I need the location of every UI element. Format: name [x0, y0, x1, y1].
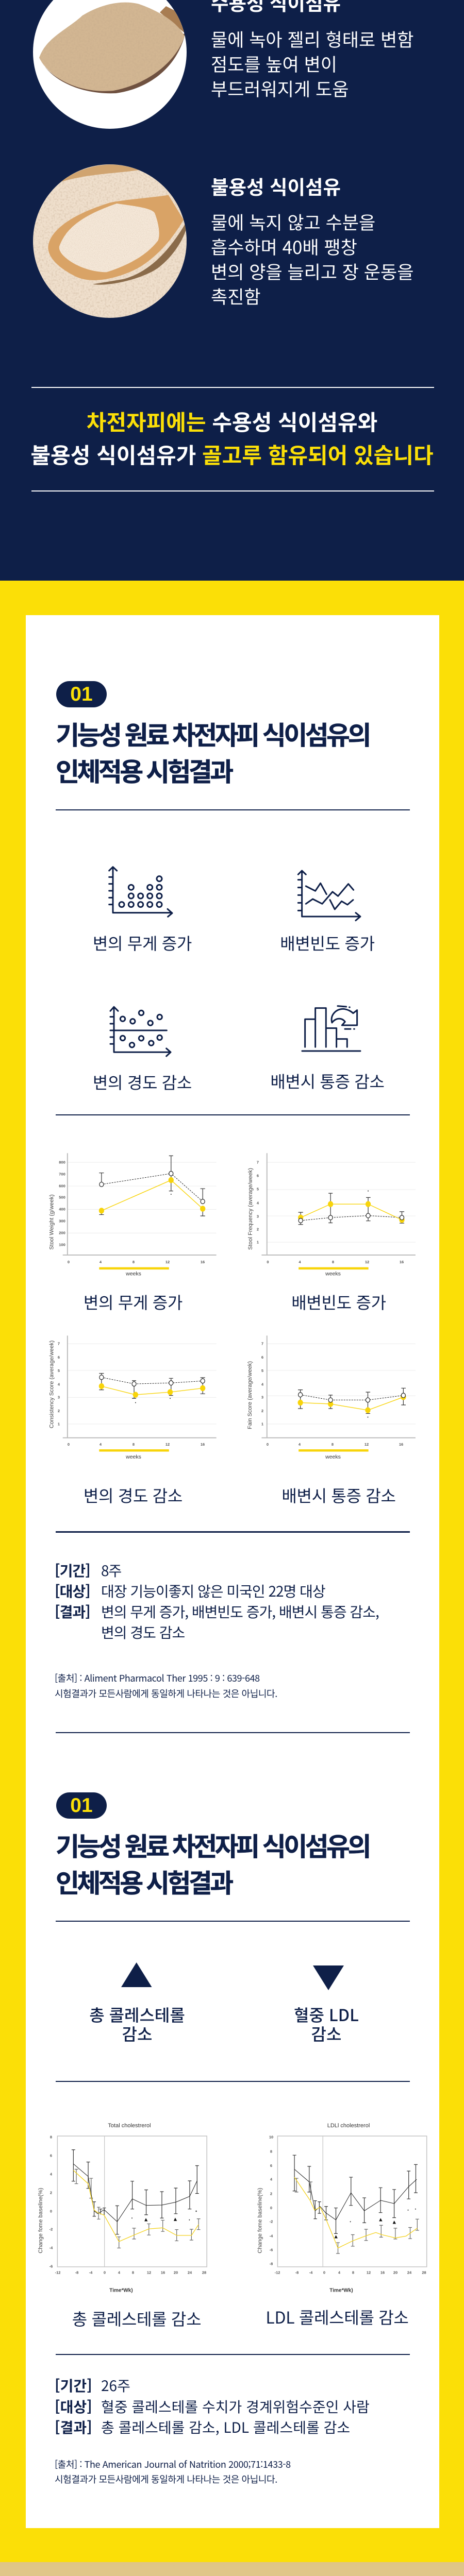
- text: study details 2: [기간]: [55, 2375, 92, 2396]
- caption: LDL chart: LDL 콜레스테롤 감소: [266, 2305, 409, 2329]
- section: gold secondary materials background: [0, 2562, 464, 2576]
- chart: total cholesterol: 12: [147, 2270, 151, 2275]
- chart: stool weight: 4: [100, 1260, 102, 1264]
- chart: pain score: 3: [261, 1395, 263, 1399]
- chart: LDL cholesterol: -6: [270, 2247, 273, 2252]
- section: navy fiber types: [31, 0, 434, 492]
- title: clinical results 1: [56, 715, 369, 789]
- chart: total cholesterol: 6: [50, 2154, 52, 2158]
- chart: LDL cholesterol: 16: [380, 2270, 385, 2275]
- text: source 2: [55, 2458, 291, 2486]
- section: yellow clinical results: [0, 581, 464, 2562]
- icon: frequency lines: [298, 871, 360, 921]
- chart: stool weight: 300: [59, 1219, 65, 1223]
- chart: pain score: 0: [267, 1442, 269, 1447]
- chart: LDL cholesterol: 12: [367, 2270, 371, 2275]
- chart: total cholesterol: 28: [202, 2270, 206, 2275]
- chart: total cholesterol: 8: [50, 2135, 52, 2139]
- chart: pain score: 8: [332, 1442, 334, 1447]
- chart: pain score: 7: [261, 1342, 263, 1346]
- chart: total cholesterol: 2: [50, 2191, 52, 2195]
- text: study details 2: [결과]: [55, 2417, 92, 2437]
- chart: LDL cholesterol: 0: [270, 2206, 272, 2210]
- chart: stool frequency: 12: [365, 1260, 369, 1264]
- chart: LDL cholesterol: 0: [323, 2270, 325, 2275]
- chart: pain score: 5: [261, 1368, 263, 1373]
- text: source 2: [출처] : The American Journal of Natrition 2000;71:1433-8: [55, 2458, 291, 2471]
- title: clinical results 2: 기능성 원료 차전자피 식이섬유의: [56, 1826, 369, 1863]
- chart: total cholesterol: Total cholestrerol: [108, 2123, 151, 2129]
- text: soluble fiber description: 부드러워지게 도움: [211, 75, 349, 101]
- chart: total cholesterol: 8: [132, 2270, 134, 2275]
- title: clinical results 2: 인체적용 시험결과: [56, 1863, 231, 1900]
- label: total cholesterol: 총 콜레스테롤: [89, 2003, 185, 2026]
- panel: white results card: [26, 615, 439, 2528]
- chart: pain score: 4: [261, 1382, 264, 1387]
- label: stool frequency: 배변빈도 증가: [280, 931, 375, 955]
- badge: 01: 01: [70, 683, 93, 705]
- chart: stool weight: 400: [59, 1207, 65, 1212]
- chart: total cholesterol: 20: [174, 2270, 178, 2275]
- chart: pain score: weeks: [325, 1454, 341, 1460]
- chart: pain score: Fain Score (average/week): [247, 1361, 253, 1429]
- callout: fiber summary: 차전자피에는 수용성 식이섬유와: [87, 405, 377, 437]
- label: blood LDL: [294, 2003, 359, 2045]
- callout: fiber summary: 불용성 식이섬유가 골고루 함유되어 있습니다: [30, 438, 434, 470]
- text: insoluble fiber description: 촉진함: [211, 283, 261, 309]
- chart: LDL cholesterol: -8: [295, 2270, 299, 2275]
- chart: LDL cholesterol: -2: [270, 2219, 273, 2224]
- chart: total cholesterol: 16: [161, 2270, 165, 2275]
- callout: fiber summary: [30, 405, 434, 470]
- badge: 01 second: 01: [70, 1794, 93, 1817]
- icon: consistency dots: [110, 1007, 171, 1056]
- chart: stool frequency: 4: [257, 1200, 259, 1206]
- charts: four stool outcome line charts: [48, 1153, 416, 1460]
- text: study details 1: 8주: [101, 1560, 121, 1581]
- caption: total cholesterol chart: 총 콜레스테롤 감소: [72, 2307, 201, 2330]
- chart: stool frequency: [247, 1153, 416, 1277]
- chart: LDL cholesterol: 8: [352, 2270, 354, 2275]
- chart: pain score: 16: [399, 1442, 403, 1447]
- chart: total cholesterol: 24: [188, 2270, 192, 2275]
- chart: stool weight: 600: [59, 1184, 65, 1188]
- chart: stool frequency: 0: [267, 1260, 269, 1264]
- chart: consistency score: 4: [58, 1382, 60, 1387]
- badge: 01: [56, 681, 107, 707]
- chart: pain score: 1: [261, 1422, 263, 1426]
- chart: LDL cholesterol: 10: [269, 2135, 273, 2139]
- chart: LDL cholesterol: 4: [270, 2177, 273, 2181]
- text: study details 2: [55, 2375, 370, 2437]
- chart: total cholesterol: 4: [118, 2270, 121, 2275]
- chart: consistency score: 8: [132, 1442, 135, 1447]
- text: insoluble fiber description: 물에 녹지 않고 수분을: [211, 209, 375, 235]
- chart: stool frequency: 5: [257, 1187, 259, 1191]
- chart: total cholesterol: 0: [104, 2270, 106, 2275]
- chart: LDL cholesterol: -4: [270, 2234, 273, 2238]
- chart: stool weight: 8: [132, 1260, 135, 1264]
- title: clinical results 2: [56, 1826, 369, 1900]
- chart: stool weight: weeks: [125, 1270, 141, 1277]
- chart: stool frequency: 4: [299, 1260, 301, 1264]
- chart: pain score: 12: [364, 1442, 369, 1447]
- chart: total cholesterol: -4: [49, 2245, 53, 2250]
- chart: consistency score: weeks: [125, 1454, 141, 1460]
- text: soluble fiber description: 점도를 높여 변이: [211, 50, 337, 77]
- text: study details 1: 변의 경도 감소: [101, 1622, 185, 1642]
- chart: pain score: [247, 1335, 416, 1460]
- chart: total cholesterol: 4: [50, 2172, 53, 2176]
- title: clinical results 1: 인체적용 시험결과: [56, 752, 231, 789]
- chart: consistency score: 12: [165, 1442, 170, 1447]
- chart: LDL cholesterol: 6: [270, 2163, 272, 2168]
- title: clinical results 1: 기능성 원료 차전자피 식이섬유의: [56, 715, 369, 752]
- chart: consistency score: 4: [100, 1442, 102, 1447]
- chart: consistency score: 2: [58, 1409, 60, 1413]
- text: study details 1: [대상]: [55, 1581, 90, 1601]
- photo: soluble fiber powder on spoon: [33, 0, 187, 129]
- chart: total cholesterol: -6: [49, 2264, 53, 2269]
- caption: consistency chart: 변의 경도 감소: [84, 1483, 183, 1507]
- chart: total cholesterol: -12: [55, 2270, 60, 2275]
- label: blood LDL: 혈중 LDL: [294, 2003, 359, 2026]
- chart: LDL cholesterol: 24: [407, 2270, 412, 2275]
- chart: consistency score: [48, 1335, 217, 1460]
- chart: consistency score: 0: [68, 1442, 70, 1447]
- chart: stool weight: Stool Weight (g/week): [48, 1194, 55, 1250]
- chart: consistency score: 16: [201, 1442, 205, 1447]
- chart: stool weight: 100: [59, 1243, 65, 1247]
- label: pain: 배변시 통증 감소: [270, 1069, 385, 1093]
- text: soluble fiber description: [211, 26, 413, 101]
- text: study details 1: [55, 1560, 379, 1642]
- chart: stool frequency: 8: [332, 1260, 334, 1264]
- chart: consistency score: 7: [58, 1342, 60, 1346]
- label: stool consistency: 변의 경도 감소: [93, 1070, 192, 1094]
- chart: pain score: 4: [299, 1442, 301, 1447]
- chart: stool frequency: 6: [257, 1174, 259, 1178]
- icons: four result icons: [108, 866, 361, 1057]
- icon: stool weight dots: [109, 867, 172, 917]
- chart: stool weight: 800: [59, 1160, 65, 1164]
- icon: bars with down arrow: [302, 1006, 360, 1051]
- chart: stool weight: 500: [59, 1195, 65, 1199]
- charts: cholesterol line charts: [38, 2123, 427, 2294]
- icon: down triangle: [313, 1965, 344, 1990]
- chart: stool weight: [48, 1153, 217, 1277]
- chart: LDL cholesterol: 8: [270, 2149, 272, 2154]
- text: insoluble fiber description: 흡수하며 40배 팽창: [211, 233, 357, 260]
- text: study details 2: 총 콜레스테롤 감소, LDL 콜레스테롤 감소: [101, 2417, 350, 2437]
- chart: total cholesterol: -2: [49, 2227, 53, 2232]
- chart: consistency score: 1: [58, 1422, 60, 1426]
- text: study details 2: [대상]: [55, 2396, 92, 2416]
- chart: stool weight: 200: [59, 1230, 65, 1235]
- chart: stool frequency: 3: [257, 1214, 259, 1219]
- chart: stool weight: 700: [59, 1172, 65, 1177]
- text: insoluble fiber description: 변의 양을 늘리고 장 운동을: [211, 258, 413, 284]
- text: source 2: 시험결과가 모든사람에게 동일하게 나타나는 것은 아닙니다.: [55, 2472, 277, 2486]
- chart: total cholesterol: 0: [50, 2209, 52, 2213]
- chart: stool frequency: 2: [257, 1227, 259, 1231]
- chart: LDL cholesterol: LDLl cholestrerol: [327, 2123, 370, 2129]
- text: study details 2: 26주: [101, 2375, 130, 2396]
- text: study details 1: [기간]: [55, 1560, 90, 1581]
- icon: up triangle: [121, 1962, 152, 1987]
- caption: stool weight chart: 변의 무게 증가: [84, 1290, 183, 1314]
- caption: pain chart: 배변시 통증 감소: [281, 1483, 396, 1507]
- text: insoluble fiber description: [211, 209, 413, 309]
- chart: total cholesterol: Time*Wk): [109, 2287, 133, 2294]
- chart: consistency score: Consistency Score (average/week): [48, 1341, 55, 1428]
- chart: stool frequency: 16: [400, 1260, 404, 1264]
- chart: LDL cholesterol: -4: [309, 2270, 313, 2275]
- text: study details 1: 변의 무게 증가, 배변빈도 증가, 배변시 통증 감소,: [101, 1601, 379, 1622]
- label: stool weight: 변의 무게 증가: [93, 931, 192, 955]
- caption: stool frequency chart: 배변빈도 증가: [291, 1290, 386, 1314]
- chart: stool weight: 0: [68, 1260, 70, 1264]
- text: soluble fiber description: 물에 녹아 젤리 형태로 변함: [211, 26, 413, 52]
- chart: stool frequency: weeks: [325, 1270, 341, 1277]
- chart: stool frequency: 1: [257, 1240, 259, 1245]
- chart: total cholesterol: Change fome baseline(%): [38, 2188, 44, 2253]
- chart: LDL cholesterol: 28: [422, 2270, 426, 2275]
- chart: LDL cholesterol: 4: [338, 2270, 341, 2275]
- label: total cholesterol: 감소: [122, 2022, 152, 2045]
- chart: pain score: 6: [261, 1355, 263, 1360]
- text: source 1: [출처] : Aliment Pharmacol Ther 1995 : 9 : 639-648: [55, 1671, 260, 1685]
- label: total cholesterol: [89, 2003, 185, 2045]
- text: source 1: 시험결과가 모든사람에게 동일하게 나타나는 것은 아닙니다.: [55, 1687, 277, 1700]
- text: study details 1: 대장 기능이좋지 않은 미국인 22명 대상: [101, 1581, 325, 1601]
- chart: LDL cholesterol: Time*Wk): [329, 2287, 353, 2294]
- chart: consistency score: 6: [58, 1355, 60, 1360]
- heading: insoluble fiber: 불용성 식이섬유: [211, 172, 341, 200]
- chart: LDL cholesterol: 20: [393, 2270, 397, 2275]
- text: source 1: [55, 1671, 277, 1700]
- badge: 01 second: [56, 1792, 107, 1819]
- chart: total cholesterol: -4: [89, 2270, 93, 2275]
- chart: total cholesterol: -8: [75, 2270, 78, 2275]
- chart: LDL cholesterol: -12: [275, 2270, 280, 2275]
- chart: pain score: 2: [261, 1409, 263, 1413]
- photo: insoluble fiber flakes with wooden spoon: [33, 164, 187, 318]
- chart: LDL cholesterol: 2: [270, 2192, 272, 2196]
- text: study details 2: 혈중 콜레스테롤 수치가 경계위험수준인 사람: [101, 2396, 370, 2416]
- chart: stool frequency: Stool Frequency (average/week): [247, 1168, 254, 1250]
- label: blood LDL: 감소: [311, 2022, 341, 2045]
- chart: LDL cholesterol: Change fome baseline(%): [257, 2188, 263, 2253]
- chart: total cholesterol: [38, 2123, 207, 2294]
- chart: LDL cholesterol: -8: [270, 2262, 273, 2266]
- text: study details 1: [결과]: [55, 1601, 90, 1622]
- chart: stool weight: 12: [165, 1260, 170, 1264]
- chart: stool frequency: 7: [257, 1160, 259, 1164]
- chart: stool weight: 16: [201, 1260, 205, 1264]
- chart: consistency score: 5: [58, 1368, 60, 1373]
- chart: LDL cholesterol: [257, 2123, 427, 2294]
- chart: consistency score: 3: [58, 1395, 60, 1399]
